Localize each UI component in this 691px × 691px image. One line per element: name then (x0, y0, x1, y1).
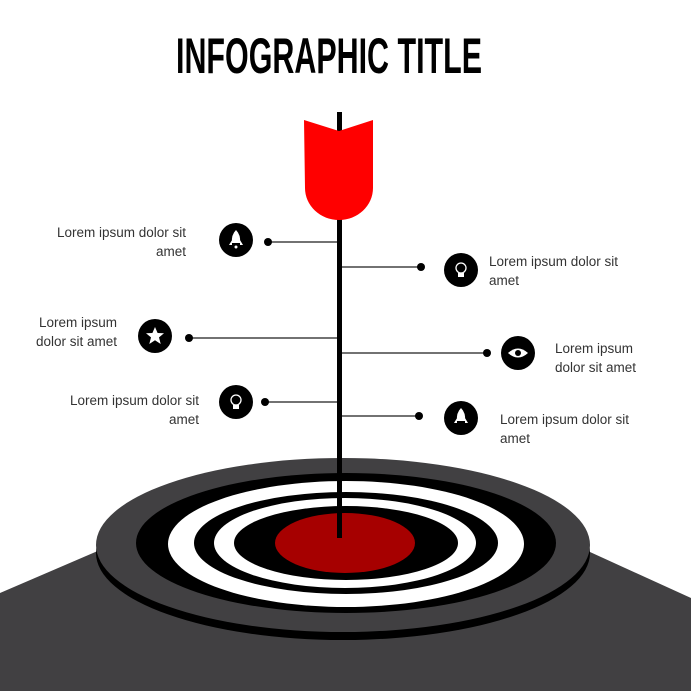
icon: eye (501, 336, 535, 370)
ground (0, 550, 691, 691)
arrow shaft (337, 112, 342, 538)
text blocks: amet (500, 431, 530, 446)
arrow fletching (304, 120, 373, 220)
icon: rocket 2 (444, 401, 478, 435)
icon: bulb (444, 253, 478, 287)
text blocks (36, 225, 636, 446)
text blocks: Lorem ipsum dolor sit (489, 254, 618, 269)
text blocks: Lorem ipsum (39, 315, 117, 330)
text blocks: amet (156, 244, 186, 259)
text blocks: Lorem ipsum dolor sit (70, 393, 199, 408)
text blocks: amet (489, 273, 519, 288)
text blocks: Lorem ipsum (555, 341, 633, 356)
text blocks: Lorem ipsum dolor sit (500, 412, 629, 427)
text blocks: dolor sit amet (555, 360, 636, 375)
icon: star (138, 319, 172, 353)
text blocks: Lorem ipsum dolor sit (57, 225, 186, 240)
icon: bulb 2 (219, 385, 253, 419)
text blocks: amet (169, 412, 199, 427)
icon: rocket (219, 223, 253, 257)
connectors (189, 242, 487, 416)
text blocks: dolor sit amet (36, 334, 117, 349)
title: INFOGRAPHIC TITLE (176, 28, 482, 84)
target (96, 458, 590, 640)
